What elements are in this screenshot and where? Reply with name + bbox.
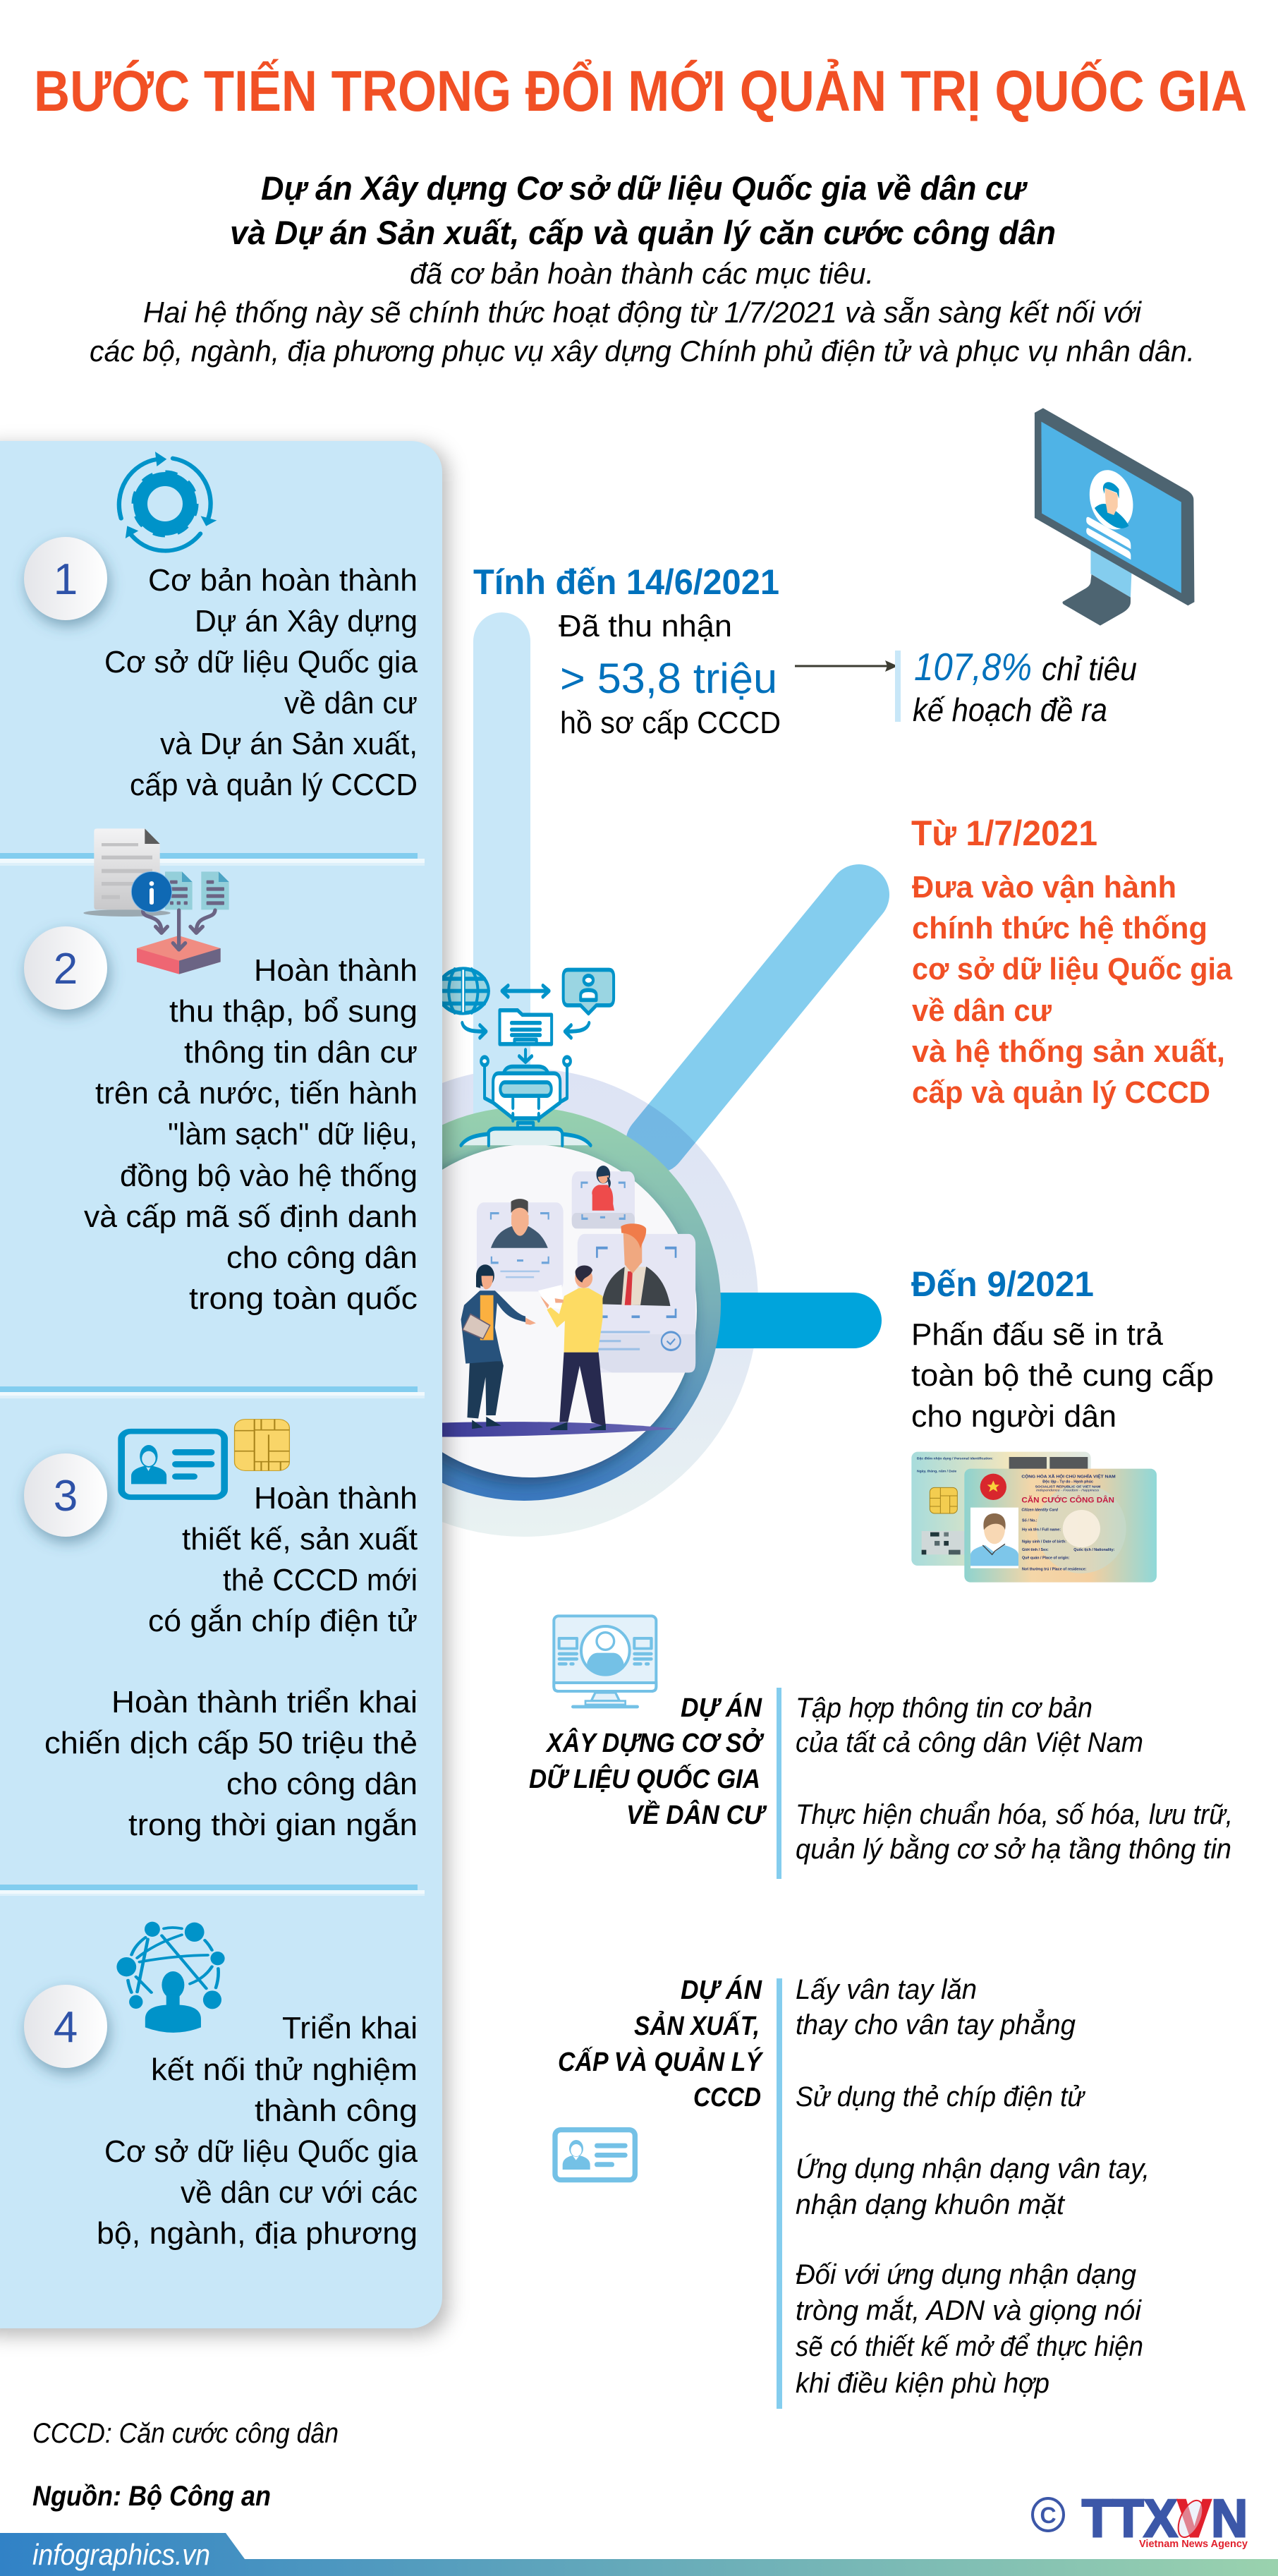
icon: globe <box>438 969 489 1013</box>
intro text block <box>90 169 1195 368</box>
icon: monitor with profile <box>554 1616 656 1708</box>
card front: Quốc tịch / Nationality: <box>1073 1547 1115 1552</box>
step 4 text: bộ, ngành, địa phương <box>97 2216 418 2251</box>
step 1 text: Cơ sở dữ liệu Quốc gia <box>104 645 418 679</box>
project 2 heading: CẤP VÀ QUẢN LÝ <box>558 2046 764 2077</box>
project 1 heading: DỰ ÁN <box>681 1692 762 1723</box>
paper <box>538 1285 564 1310</box>
panel: left steps <box>0 441 442 2328</box>
step 2 text: thu thập, bổ sung <box>169 994 418 1029</box>
project 1 heading <box>529 1692 767 1830</box>
card front: Citizen Identity Card <box>1021 1508 1059 1512</box>
woman figure <box>461 1264 536 1429</box>
dividers <box>0 853 425 1896</box>
pale outer circle <box>290 1068 758 1537</box>
step 4 text: kết nối thử nghiệm <box>151 2052 418 2087</box>
project 2 details: Đối với ứng dụng nhận dạng <box>796 2259 1136 2290</box>
step 1 text: Dự án Xây dựng <box>195 604 418 639</box>
intro text block: Dự án Xây dựng Cơ sở dữ liệu Quốc gia về dân cư <box>261 169 1028 207</box>
card front: Independence - Freedom - Happiness <box>1036 1489 1100 1493</box>
project 2 details: Sử dụng thẻ chíp điện tử <box>796 2081 1085 2112</box>
logo: TTXVN: Vietnam News Agency <box>1139 2538 1248 2550</box>
project 2 heading: DỰ ÁN <box>681 1974 762 2005</box>
project 2 details: Lấy vân tay lăn <box>796 1974 977 2005</box>
project 2 details: Ứng dụng nhận dạng vân tay, <box>796 2153 1150 2184</box>
step 2 text: thông tin dân cư <box>184 1035 418 1070</box>
step 3 text: Hoàn thành <box>254 1481 418 1516</box>
milestone: 1/7/2021: và hệ thống sản xuất, <box>912 1034 1225 1069</box>
icon: ID card small <box>555 2130 635 2180</box>
callout: 107,8% <box>895 645 1137 728</box>
step 1 badge <box>24 537 109 626</box>
icon: documents into database <box>83 828 229 974</box>
icon: folder <box>499 1010 552 1044</box>
intro text block: Hai hệ thống này sẽ chính thức hoạt động từ 1/7/2021 và sẵn sàng kết nối với <box>143 296 1143 329</box>
callout: 107,8%: kế hoạch đề ra <box>913 691 1107 728</box>
card back: Đặc điểm nhận dạng / Personal identification: <box>917 1456 993 1461</box>
project 1 details: Thực hiện chuẩn hóa, số hóa, lưu trữ, <box>796 1799 1233 1830</box>
card: suit man <box>578 1223 695 1372</box>
step 3 text: trong thời gian ngắn <box>128 1808 418 1842</box>
robot with network icons <box>438 969 614 1145</box>
project 2 heading: SẢN XUẤT, <box>634 2010 760 2041</box>
inner white circle <box>364 1144 697 1477</box>
project 2 details: thay cho vân tay phẳng <box>796 2008 1076 2040</box>
project 2 details <box>796 1974 1150 2399</box>
icon: profile bubble <box>564 970 614 1013</box>
step 2 text: trong toàn quốc <box>189 1281 418 1316</box>
timeline bar: from 1/7/2021 <box>656 895 859 1143</box>
step 1 text <box>104 563 418 802</box>
step 3 text: cho công dân <box>226 1767 418 1801</box>
step 2 badge: 2 <box>54 945 78 993</box>
card front: Ngày sinh / Date of birth: <box>1022 1540 1066 1544</box>
project 1 heading: DỮ LIỆU QUỐC GIA <box>529 1762 760 1794</box>
milestone: 9/2021 <box>911 1264 1214 1434</box>
panel shadow <box>0 446 448 2335</box>
card front: Số / No.: <box>1022 1518 1037 1523</box>
step 1 badge: 1 <box>54 555 78 604</box>
arrow <box>795 660 898 672</box>
milestone: 9/2021: Đến 9/2021 <box>911 1264 1094 1304</box>
floor <box>436 1422 676 1437</box>
card front: Độc lập - Tự do - Hạnh phúc <box>1042 1480 1093 1484</box>
source: Nguồn: Bộ Công an <box>32 2481 271 2512</box>
project 2 heading: CCCD <box>693 2083 761 2112</box>
step 1 text: về dân cư <box>284 686 418 720</box>
milestone: 9/2021: cho người dân <box>911 1399 1116 1434</box>
card front: Họ và tên / Full name: <box>1022 1528 1061 1532</box>
icon: connected network person <box>116 1922 225 2033</box>
step 2 text: đồng bộ vào hệ thống <box>120 1159 418 1193</box>
step 3 text: chiến dịch cấp 50 triệu thẻ <box>44 1726 418 1760</box>
logo: TTXVN: TTXVN <box>1082 2489 1248 2548</box>
step 2 text <box>84 953 418 1316</box>
step 2 badge <box>24 926 109 1015</box>
step 2 text: "làm sạch" dữ liệu, <box>168 1117 418 1151</box>
milestone: 14/6/2021: Tính đến 14/6/2021 <box>473 562 779 602</box>
project 1 heading: VỀ DÂN CƯ <box>626 1799 767 1830</box>
milestone: 1/7/2021: về dân cư <box>912 993 1052 1028</box>
card: man <box>477 1199 564 1292</box>
project 1 heading: XÂY DỰNG CƠ SỞ <box>545 1727 765 1758</box>
icon: gear <box>119 453 215 551</box>
step 2 text: và cấp mã số định danh <box>84 1199 418 1234</box>
project 1 details: của tất cả công dân Việt Nam <box>796 1727 1143 1758</box>
project 2 details: khi điều kiện phù hợp <box>796 2368 1049 2399</box>
card front: CỘNG HÒA XÃ HỘI CHỦ NGHĨA VIỆT NAM <box>1021 1474 1116 1480</box>
milestone: 1/7/2021: cơ sở dữ liệu Quốc gia <box>912 952 1232 986</box>
step 3 text: Hoàn thành triển khai <box>111 1685 418 1719</box>
timeline bar: to 9/2021 <box>677 1293 882 1348</box>
milestone: 14/6/2021 <box>473 562 781 740</box>
project 1 details <box>796 1693 1233 1865</box>
step 1 text: và Dự án Sản xuất, <box>160 727 418 761</box>
card front: CĂN CƯỚC CÔNG DÂN <box>1021 1495 1114 1504</box>
step 4 text: Cơ sở dữ liệu Quốc gia <box>104 2134 418 2169</box>
project 2 details: tròng mắt, ADN và giọng nói <box>796 2294 1142 2326</box>
ID card images <box>911 1452 1157 1583</box>
milestone: 1/7/2021: Đưa vào vận hành <box>912 870 1176 905</box>
logo: TTXVN: C <box>1040 2503 1057 2528</box>
intro text block: và Dự án Sản xuất, cấp và quản lý căn cước công dân <box>230 214 1056 251</box>
project 1 divider <box>777 1688 781 1879</box>
card back: Ngày, tháng, năm / Date <box>917 1470 956 1474</box>
project 2 heading <box>558 1974 764 2112</box>
project 1 details: Tập hợp thông tin cơ bản <box>796 1693 1093 1724</box>
intro text block: đã cơ bản hoàn thành các mục tiêu. <box>410 257 874 290</box>
project 1 details: quản lý bằng cơ sở hạ tầng thông tin <box>796 1833 1231 1865</box>
milestone: 9/2021: Phấn đấu sẽ in trả <box>911 1317 1164 1352</box>
step 3 text <box>44 1481 418 1842</box>
step 2 text: cho công dân <box>226 1240 418 1275</box>
step 3 badge <box>24 1453 109 1542</box>
step 3 text: có gắn chíp điện tử <box>148 1604 418 1638</box>
arrow: double <box>502 986 549 997</box>
milestone: 14/6/2021: Đã thu nhận <box>559 609 732 643</box>
card front: Giới tính / Sex: <box>1022 1548 1049 1552</box>
panel background <box>0 441 442 2328</box>
card: woman <box>572 1166 635 1228</box>
milestone: 1/7/2021: Từ 1/7/2021 <box>911 814 1097 853</box>
man figure <box>540 1265 606 1430</box>
card front: Nơi thường trú / Place of residence: <box>1022 1568 1087 1572</box>
milestone: 1/7/2021: cấp và quản lý CCCD <box>912 1075 1210 1110</box>
footer band <box>0 2533 1278 2576</box>
card back <box>911 1452 1091 1566</box>
project 2 details: nhận dạng khuôn mặt <box>796 2189 1066 2220</box>
footnote: CCCD: Căn cước công dân <box>32 2418 339 2449</box>
intro text block: các bộ, ngành, địa phương phục vụ xây dựng Chính phủ điện tử và phục vụ nhân dân. <box>90 334 1195 368</box>
icon: ID card with chip <box>121 1420 289 1497</box>
callout: 107,8%: 107,8% <box>914 645 1032 689</box>
step 2 text: trên cả nước, tiến hành <box>95 1076 418 1111</box>
step 3 badge: 3 <box>54 1472 78 1520</box>
card front <box>964 1469 1157 1583</box>
gradient ring <box>327 1107 721 1501</box>
icon: computer monitor <box>1035 408 1194 626</box>
step 4 text: thành công <box>255 2093 418 2128</box>
step 4 badge <box>24 1985 109 2074</box>
project 2 details: sẽ có thiết kế mở để thực hiện <box>796 2331 1143 2362</box>
step 3 text: thiết kế, sản xuất <box>182 1522 418 1556</box>
milestone: 1/7/2021 <box>911 814 1232 1110</box>
arrows into folder <box>462 1023 589 1062</box>
callout: 107,8%: chỉ tiêu <box>1042 651 1137 687</box>
step 4 badge: 4 <box>54 2003 78 2052</box>
icon: robot <box>461 1057 590 1145</box>
milestone: 14/6/2021: hồ sơ cấp CCCD <box>560 706 781 740</box>
step 4 text <box>97 2011 418 2251</box>
step 1 text: cấp và quản lý CCCD <box>130 768 418 802</box>
step 1 text: Cơ bản hoàn thành <box>148 563 418 598</box>
milestone: 9/2021: toàn bộ thẻ cung cấp <box>911 1358 1214 1393</box>
step 4 text: Triển khai <box>282 2011 418 2045</box>
ring inner shading <box>358 1149 693 1484</box>
timeline bar: to 14/6/2021 <box>473 612 530 1129</box>
card front: SOCIALIST REPUBLIC OF VIET NAM <box>1035 1484 1100 1489</box>
step 3 text: thẻ CCCD mới <box>223 1563 418 1597</box>
step 2 text: Hoàn thành <box>254 953 418 988</box>
milestone: 14/6/2021: > 53,8 triệu <box>560 655 777 702</box>
project 2 divider <box>777 1978 782 2409</box>
footer band: infographics.vn <box>32 2538 210 2571</box>
milestone: 1/7/2021: chính thức hệ thống <box>912 911 1207 945</box>
card front: Quê quán / Place of origin: <box>1022 1556 1070 1560</box>
step 4 text: về dân cư với các <box>181 2175 418 2210</box>
illustration: people and ID cards <box>436 1166 695 1437</box>
